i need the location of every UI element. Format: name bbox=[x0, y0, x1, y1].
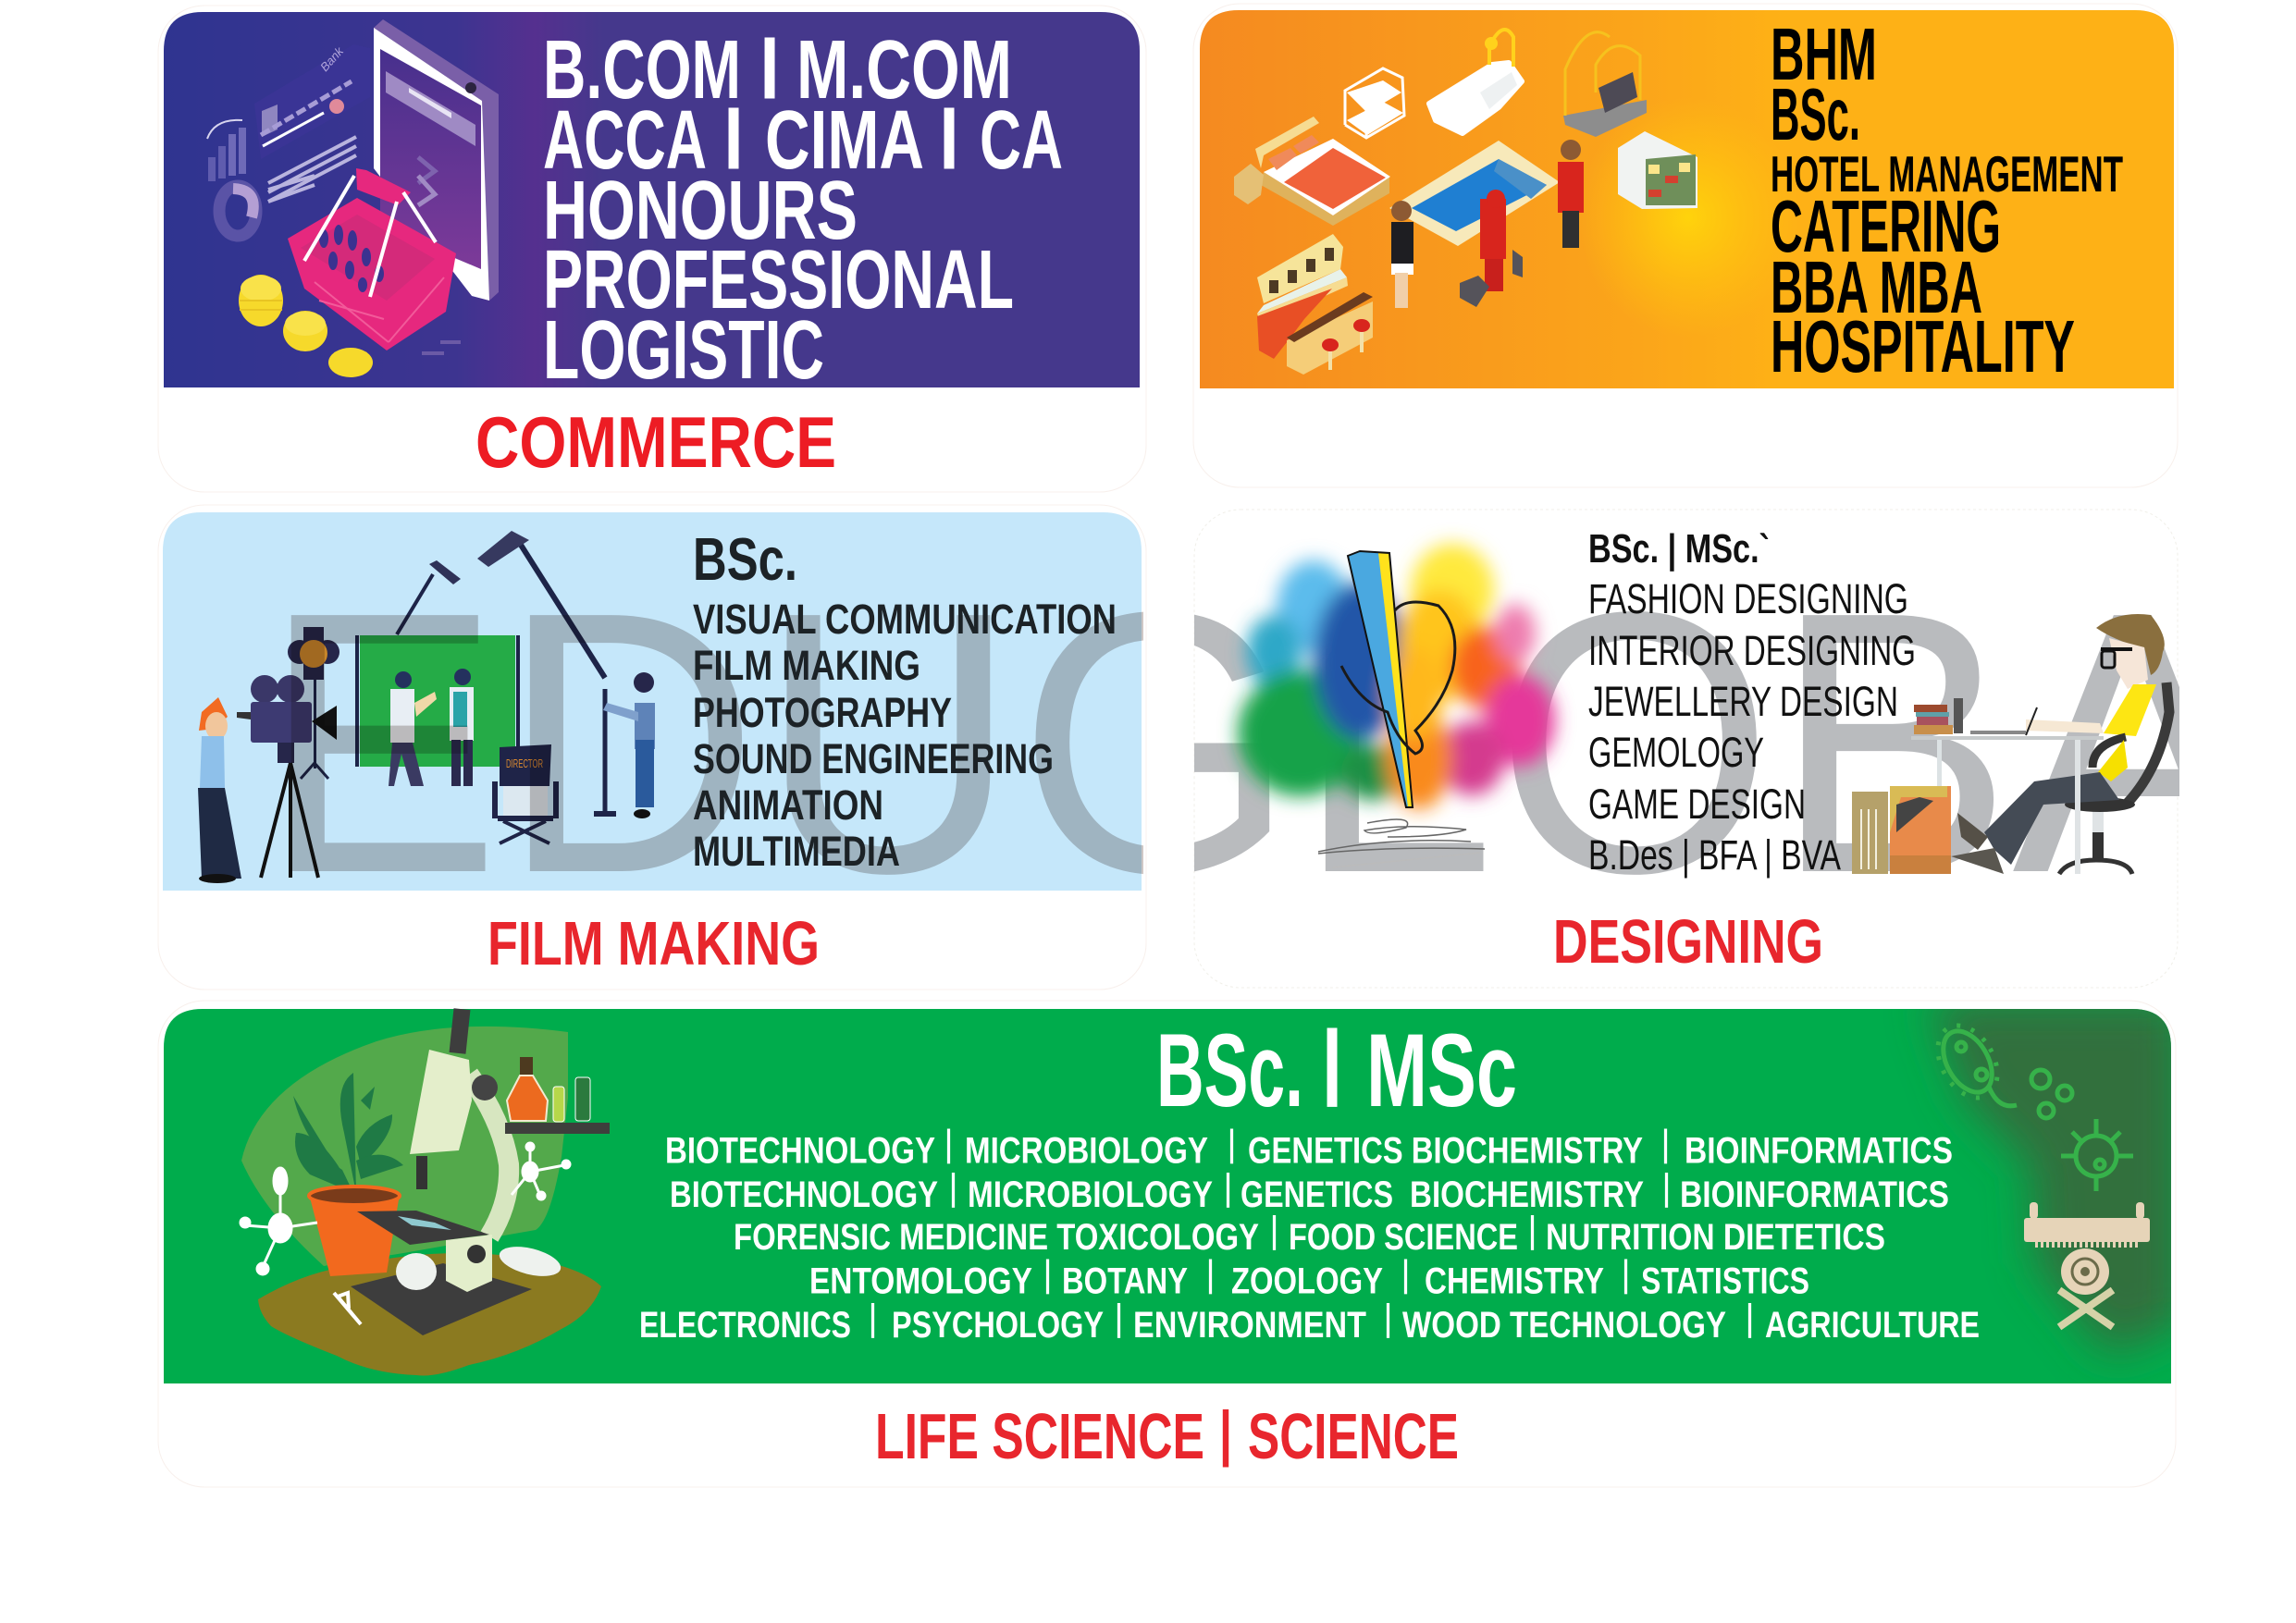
life science course list: | bbox=[1044, 1254, 1051, 1295]
life science course list: | bbox=[1116, 1297, 1122, 1338]
designing course list: FASHION DESIGNING bbox=[1588, 575, 1908, 622]
film making label: FILM MAKING bbox=[488, 909, 820, 978]
glow behind hotel illustration bbox=[1577, 97, 1799, 338]
hospitality banner background bbox=[1200, 10, 2174, 388]
life science course list: BIOTECHNOLOGY bbox=[670, 1174, 938, 1215]
life science course list: WOOD TECHNOLOGY bbox=[1402, 1305, 1726, 1346]
life science course list: FOOD SCIENCE bbox=[1289, 1217, 1518, 1258]
shadow behind science icons bbox=[1929, 999, 2183, 1355]
life science course list: BIOINFORMATICS bbox=[1685, 1130, 1953, 1171]
life science heading: MSc bbox=[1366, 1013, 1517, 1128]
designing course list: GEMOLOGY bbox=[1588, 729, 1764, 776]
commerce course list: HONOURS bbox=[543, 165, 858, 257]
life science course list: | bbox=[950, 1167, 957, 1208]
life science label: SCIENCE bbox=[1248, 1400, 1459, 1472]
film making course list: SOUND ENGINEERING bbox=[693, 735, 1054, 782]
life science course list: BIOINFORMATICS bbox=[1680, 1174, 1949, 1215]
commerce course list: PROFESSIONAL bbox=[543, 234, 1014, 326]
life science heading: BSc. bbox=[1156, 1013, 1303, 1128]
life science course list: | bbox=[870, 1297, 876, 1338]
life science course list: | bbox=[1385, 1297, 1391, 1338]
hospitality course list: BSc. bbox=[1771, 73, 1860, 155]
life science course list: STATISTICS bbox=[1641, 1261, 1809, 1302]
life science course list: GENETICS BIOCHEMISTRY bbox=[1248, 1130, 1643, 1171]
commerce course list: | bbox=[938, 96, 960, 169]
life science course list: PSYCHOLOGY bbox=[892, 1305, 1104, 1346]
film making course list: VISUAL COMMUNICATION bbox=[693, 596, 1117, 643]
designing course list: JEWELLERY DESIGN bbox=[1588, 678, 1898, 725]
designing course list: B.Des | BFA | BVA bbox=[1588, 831, 1841, 879]
commerce course list: | bbox=[722, 96, 745, 169]
film making course list: BSc. bbox=[693, 525, 797, 593]
commerce course list: M.COM bbox=[796, 24, 1012, 117]
panel: film making bbox=[157, 505, 1147, 990]
life science course list: BOTANY bbox=[1062, 1261, 1188, 1302]
illustration: phone, card and shopping basket: Bank bbox=[317, 43, 347, 74]
illustration: designer at desk bbox=[1852, 614, 2169, 874]
life science course list: BIOCHEMISTRY bbox=[1410, 1174, 1644, 1215]
icons: bacteria, virus and microtome bbox=[1926, 1015, 2150, 1327]
hospitality course list: BHM bbox=[1771, 13, 1877, 95]
designing course list: INTERIOR DESIGNING bbox=[1588, 627, 1916, 674]
life science course list: ELECTRONICS bbox=[639, 1305, 851, 1346]
film making course list: ANIMATION bbox=[693, 781, 883, 829]
illustration: colour splash with pencil and face bbox=[1238, 544, 1555, 867]
commerce course list: ACCA bbox=[543, 94, 707, 187]
designing course list bbox=[1588, 526, 1916, 879]
commerce course list: CIMA bbox=[765, 94, 924, 187]
life science course list: | bbox=[1747, 1297, 1753, 1338]
designing course list: GAME DESIGN bbox=[1588, 781, 1806, 828]
life science course list: | bbox=[1228, 1123, 1235, 1163]
life science course list: GENETICS bbox=[1241, 1174, 1393, 1215]
life science course list: | bbox=[1623, 1254, 1629, 1295]
life science label: LIFE SCIENCE bbox=[875, 1400, 1204, 1472]
life science course list: | bbox=[1663, 1167, 1670, 1208]
life science course list: ZOOLOGY bbox=[1231, 1261, 1383, 1302]
life science course list: | bbox=[1225, 1167, 1231, 1208]
life science heading: | bbox=[1321, 1014, 1343, 1108]
life science course list: ENVIRONMENT bbox=[1133, 1305, 1366, 1346]
panel: hospitality bbox=[1193, 4, 2178, 487]
illustration: film set with green screen: DIRECTOR bbox=[506, 756, 543, 770]
hospitality course list: CATERING bbox=[1771, 185, 2001, 267]
life science course list: | bbox=[1271, 1210, 1278, 1250]
commerce course list: | bbox=[759, 26, 781, 99]
designing label: DESIGNING bbox=[1553, 907, 1823, 977]
life science heading bbox=[1156, 1013, 1517, 1128]
film making course list bbox=[693, 525, 1117, 875]
life science label: | bbox=[1219, 1398, 1232, 1469]
life science course list: | bbox=[1207, 1254, 1214, 1295]
panel: designing bbox=[1193, 509, 2179, 988]
life science course list: CHEMISTRY bbox=[1425, 1261, 1604, 1302]
life science banner background bbox=[164, 1009, 2171, 1383]
life science course list: MICROBIOLOGY bbox=[965, 1130, 1208, 1171]
film making course list: FILM MAKING bbox=[693, 642, 920, 689]
life science course list: NUTRITION DIETETICS bbox=[1546, 1217, 1885, 1258]
illustration: hotel room, pool and staff bbox=[1234, 30, 1697, 375]
life science course list: | bbox=[1529, 1210, 1536, 1250]
hospitality course list: BBA MBA bbox=[1771, 246, 1982, 328]
illustration: microscope, plant and bottles bbox=[241, 1008, 610, 1376]
life science course list: ENTOMOLOGY bbox=[809, 1261, 1032, 1302]
life science course list: | bbox=[1662, 1123, 1669, 1163]
commerce course list: B.COM bbox=[543, 24, 741, 117]
commerce label: COMMERCE bbox=[475, 401, 836, 483]
life science course list bbox=[639, 1123, 1980, 1346]
hospitality course list bbox=[1771, 13, 2123, 387]
life science course list: AGRICULTURE bbox=[1765, 1305, 1980, 1346]
designing course list: BSc. | MSc.` bbox=[1588, 526, 1770, 572]
commerce course list bbox=[543, 24, 1063, 397]
commerce banner background bbox=[164, 12, 1140, 387]
life science course list: BIOTECHNOLOGY bbox=[665, 1130, 935, 1171]
film making banner background bbox=[163, 512, 1142, 891]
life science course list: MICROBIOLOGY bbox=[968, 1174, 1213, 1215]
illustration: film set with green screen bbox=[198, 531, 655, 883]
panel: commerce bbox=[158, 6, 1146, 492]
film making course list: MULTIMEDIA bbox=[693, 828, 900, 875]
film making course list: PHOTOGRAPHY bbox=[693, 689, 952, 736]
commerce course list: CA bbox=[980, 94, 1063, 187]
panel: life science bbox=[158, 999, 2183, 1487]
life science course list: | bbox=[1402, 1254, 1409, 1295]
hospitality course list: HOSPITALITY bbox=[1771, 305, 2075, 387]
illustration: phone, card and shopping basket bbox=[207, 19, 499, 377]
life science course list: | bbox=[945, 1123, 952, 1163]
life science course list: FORENSIC MEDICINE TOXICOLOGY bbox=[734, 1217, 1259, 1258]
commerce course list: LOGISTIC bbox=[543, 304, 824, 397]
